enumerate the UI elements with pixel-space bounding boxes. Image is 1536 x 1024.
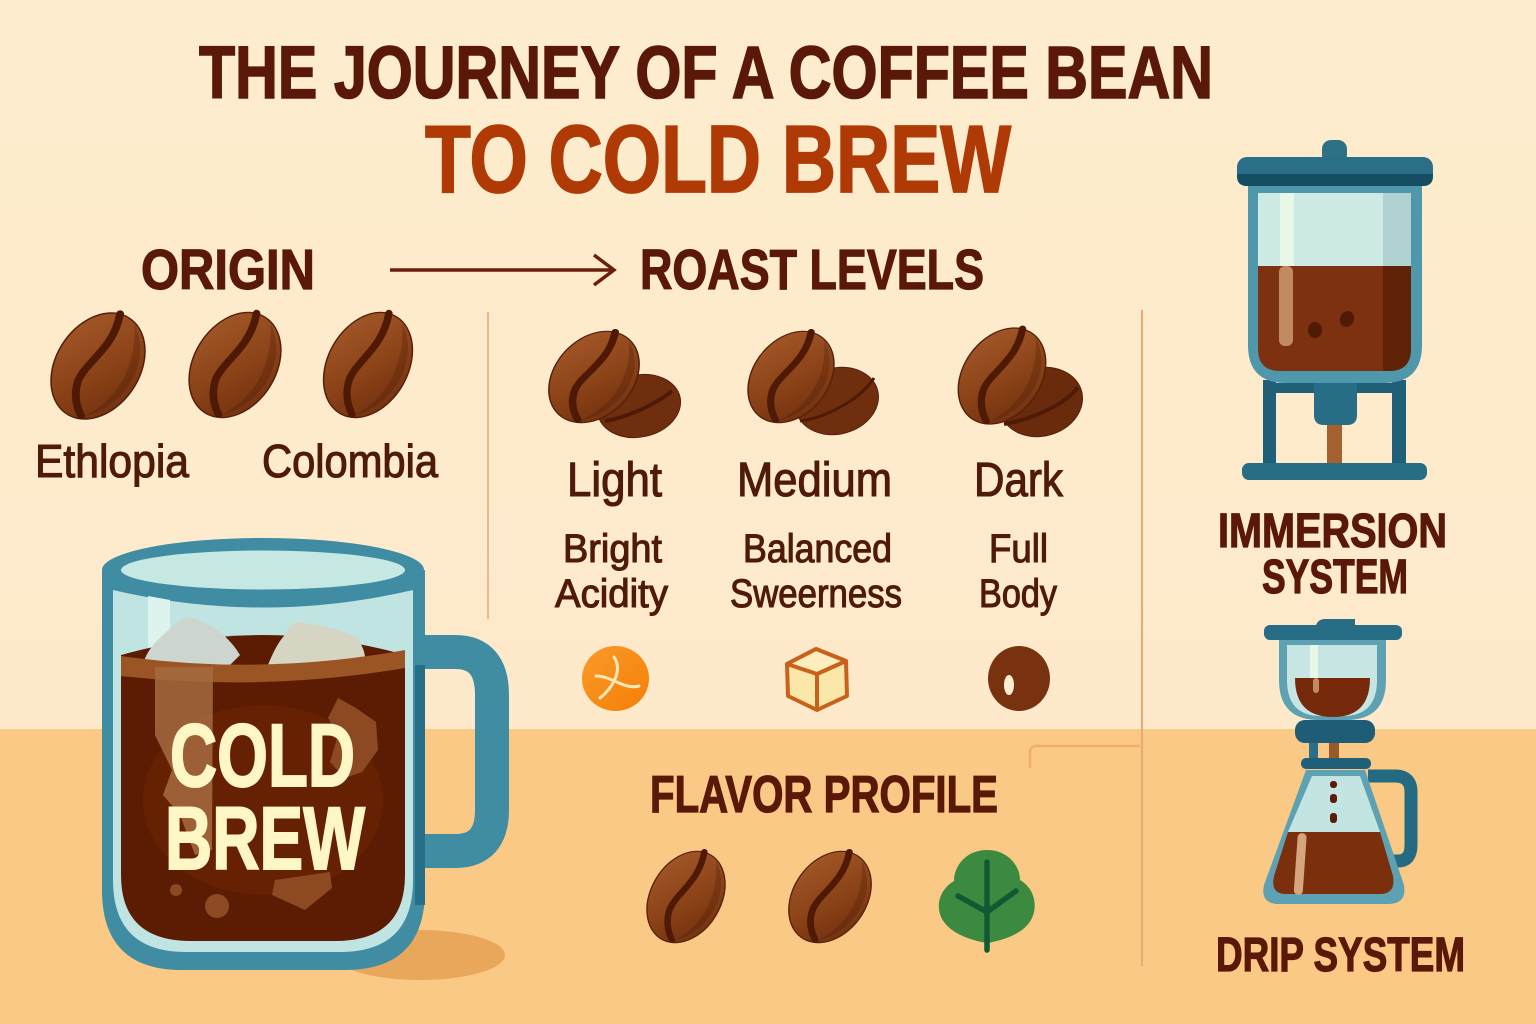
label: Ethlopia: Ethlopia	[35, 435, 189, 487]
text: bright acidity: Bright	[563, 527, 662, 571]
mug shadow	[335, 930, 505, 980]
handle shadow	[415, 665, 425, 905]
illustration: cold brew mug	[102, 538, 505, 980]
coffee glow	[143, 705, 383, 895]
icon: leaf	[939, 850, 1035, 950]
carafe	[1263, 770, 1404, 904]
right divider	[1141, 310, 1143, 966]
brewer stand	[1263, 380, 1406, 466]
label: immersion system	[1218, 505, 1447, 604]
brewer knob	[1322, 140, 1347, 164]
drip stem	[1309, 740, 1339, 762]
illustration: drip system	[1263, 619, 1411, 904]
glass highlight	[148, 596, 170, 650]
brewer base	[1242, 463, 1427, 480]
text: full body	[979, 527, 1057, 616]
mug rim	[102, 538, 424, 602]
text: balanced sweerness	[730, 527, 902, 616]
illustration: immersion system	[1237, 140, 1433, 480]
carafe dots	[1330, 781, 1337, 823]
funnel coffee	[1295, 678, 1370, 717]
icon: bean 2	[171, 299, 299, 431]
label: immersion system: SYSTEM	[1262, 551, 1408, 604]
title: TO COLD BREW	[425, 106, 1011, 213]
table notch outline	[1030, 746, 1140, 768]
carafe highlight	[1294, 833, 1307, 895]
panel: flavor profile	[632, 766, 1035, 954]
arrow: origin to roast levels	[390, 255, 614, 285]
carafe handle	[1368, 776, 1411, 861]
ice cube 1	[143, 617, 240, 667]
icon: bean 1	[33, 299, 163, 433]
water shade	[1383, 193, 1411, 266]
brewer coffee	[1258, 266, 1411, 371]
icon: bean 3	[306, 299, 430, 431]
text: balanced sweerness: Sweerness	[730, 572, 902, 616]
label: immersion system: IMMERSION	[1218, 505, 1447, 558]
carafe glass	[1288, 776, 1380, 832]
text: bright acidity	[555, 527, 668, 616]
text: full body: Body	[979, 572, 1057, 616]
funnel lid	[1264, 619, 1402, 640]
funnel glass	[1287, 645, 1377, 716]
title	[199, 31, 1213, 213]
carafe coffee	[1273, 832, 1393, 894]
heading: roast levels: ROAST LEVELS	[640, 238, 984, 302]
mug body	[102, 570, 425, 970]
collar	[1295, 720, 1375, 743]
coffee shade	[1383, 266, 1411, 371]
funnel highlight	[1310, 645, 1319, 693]
brewer water	[1258, 193, 1411, 266]
label: Medium: Medium	[737, 454, 892, 507]
coffee stains	[170, 698, 378, 918]
mug handle	[420, 652, 492, 851]
icon: sugar cube	[787, 649, 847, 710]
brewer highlight	[1279, 193, 1294, 346]
text: bright acidity: Acidity	[555, 572, 668, 616]
grounds	[1308, 309, 1357, 338]
label: Colombia: Colombia	[262, 435, 438, 487]
icon: medium roast beans	[731, 320, 886, 444]
icon: flavor bean 2	[773, 840, 887, 954]
icon: flavor bean 1	[632, 840, 740, 954]
brewer lid	[1237, 157, 1433, 186]
reflection	[155, 667, 213, 855]
panel: origin beans	[33, 299, 438, 487]
brewer body	[1248, 186, 1422, 383]
title: THE JOURNEY OF A COFFEE BEAN	[199, 31, 1213, 114]
heading: flavor profile: FLAVOR PROFILE	[650, 766, 998, 824]
icon: dark roast beans	[941, 316, 1090, 446]
background wall	[0, 0, 1536, 730]
heading: origin: ORIGIN	[141, 238, 315, 302]
icon: light roast beans	[531, 320, 687, 445]
coffee	[121, 635, 405, 941]
funnel	[1279, 640, 1386, 720]
coffee surface band	[121, 650, 405, 682]
mug label: COLD	[170, 705, 355, 805]
ice cube 2	[268, 622, 365, 665]
text: balanced sweerness: Balanced	[743, 527, 892, 571]
mug label	[165, 705, 365, 888]
brewer stem	[1327, 420, 1342, 464]
label: Light: Light	[567, 454, 662, 507]
panel: roast levels	[531, 316, 1090, 711]
icon: orange slice	[582, 646, 649, 711]
icon: coffee drop	[988, 646, 1050, 711]
label: Dark: Dark	[974, 454, 1064, 507]
mug label: BREW	[165, 788, 365, 888]
carafe plate	[1301, 758, 1371, 769]
brewer valve	[1314, 383, 1357, 425]
text: full body: Full	[989, 527, 1048, 571]
left divider	[487, 312, 489, 619]
label: drip system: DRIP SYSTEM	[1216, 929, 1465, 982]
background table	[0, 729, 1536, 1024]
mug glass	[113, 590, 413, 952]
